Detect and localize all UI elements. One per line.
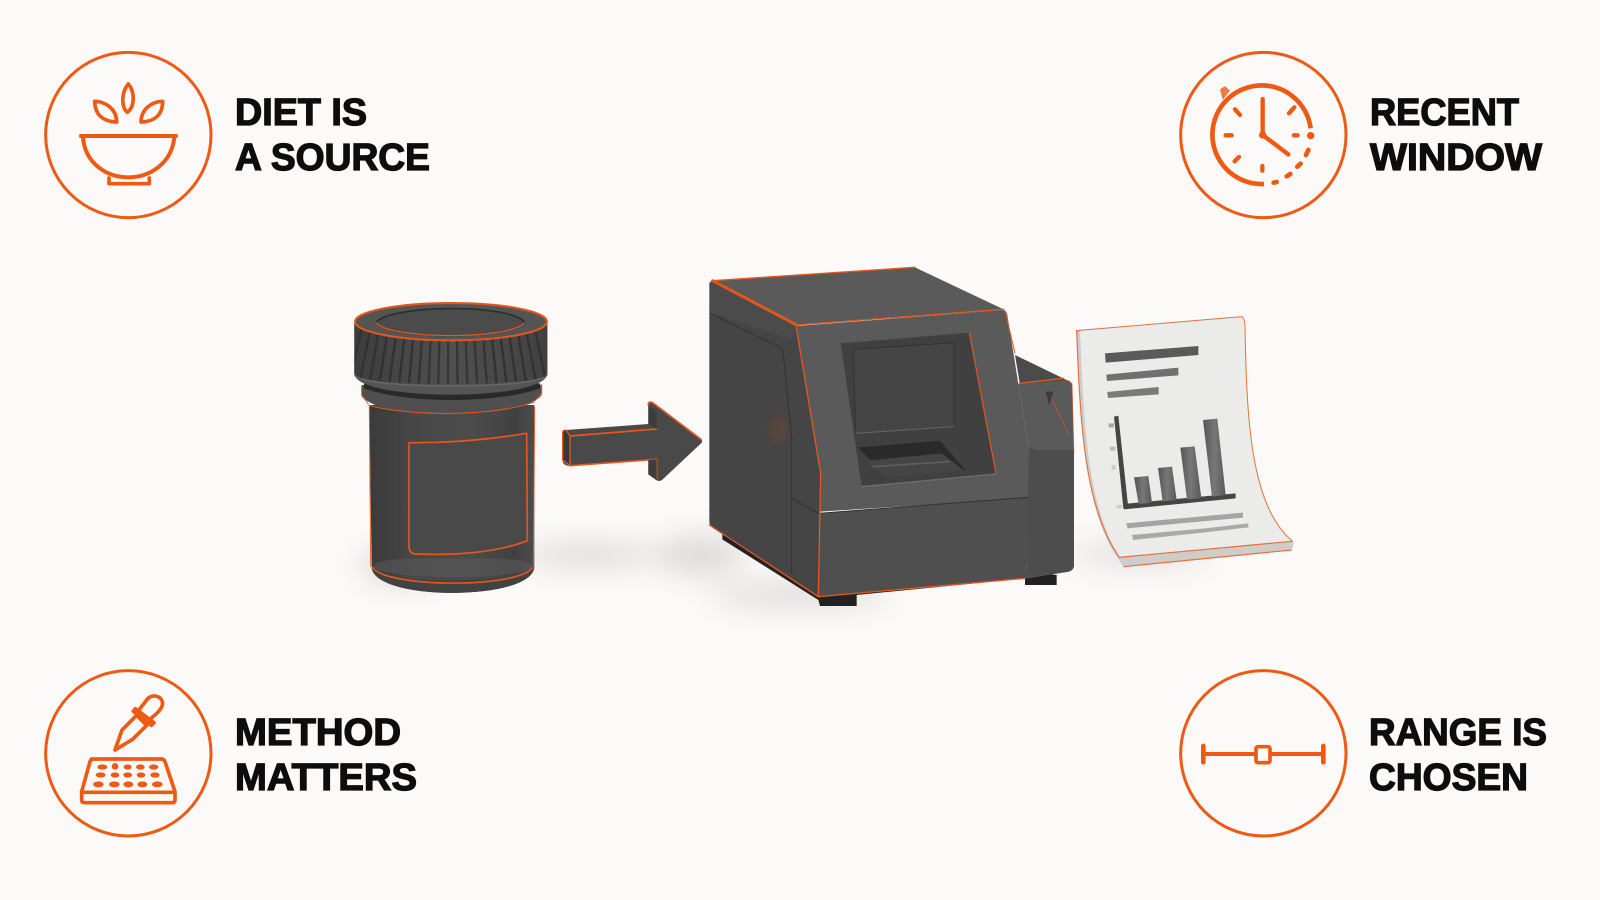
heading: recent window: WINDOW: [1370, 137, 1542, 179]
jar neck: [362, 385, 542, 415]
machine side module: [1015, 355, 1074, 578]
panel: method matters: [46, 671, 417, 836]
panel: range is chosen: [1181, 671, 1547, 836]
machine top face: [713, 267, 1005, 325]
jar cap: [354, 323, 547, 395]
icon: range bar: [1181, 671, 1346, 836]
panel: recent window: [1181, 52, 1542, 218]
paper sheet: [1076, 317, 1293, 567]
heading: diet is a source: DIET IS: [235, 92, 367, 134]
heading: range is chosen: CHOSEN: [1369, 757, 1528, 799]
machine front face: [796, 310, 1028, 512]
heading: recent window: RECENT: [1370, 92, 1519, 134]
illustration: specimen jar: [354, 303, 547, 593]
jar body: [369, 405, 534, 593]
report header lines: [1105, 346, 1198, 398]
heading: method matters: MATTERS: [235, 757, 417, 799]
icon: stopwatch clock: [1181, 52, 1346, 218]
icon: dropper and well plate: [46, 671, 211, 836]
illustration: analyzer machine: [709, 267, 1074, 606]
heading: range is chosen: RANGE IS: [1369, 712, 1547, 754]
machine left face: [709, 281, 821, 597]
machine feet: [722, 527, 1057, 606]
arrow: jar to analyzer: [563, 402, 702, 481]
panel: diet is a source: [46, 52, 430, 218]
heading: method matters: METHOD: [235, 712, 401, 754]
report footer lines: [1126, 513, 1248, 540]
jar label: [409, 433, 527, 554]
machine output tray: [858, 441, 965, 477]
machine window: [841, 333, 996, 487]
icon: bowl with leaves: [46, 52, 211, 218]
heading: diet is a source: A SOURCE: [235, 137, 430, 179]
report bar chart: [1109, 416, 1236, 509]
illustration: printed report: [1076, 317, 1293, 567]
illustration: ground shadows: [360, 535, 1210, 607]
